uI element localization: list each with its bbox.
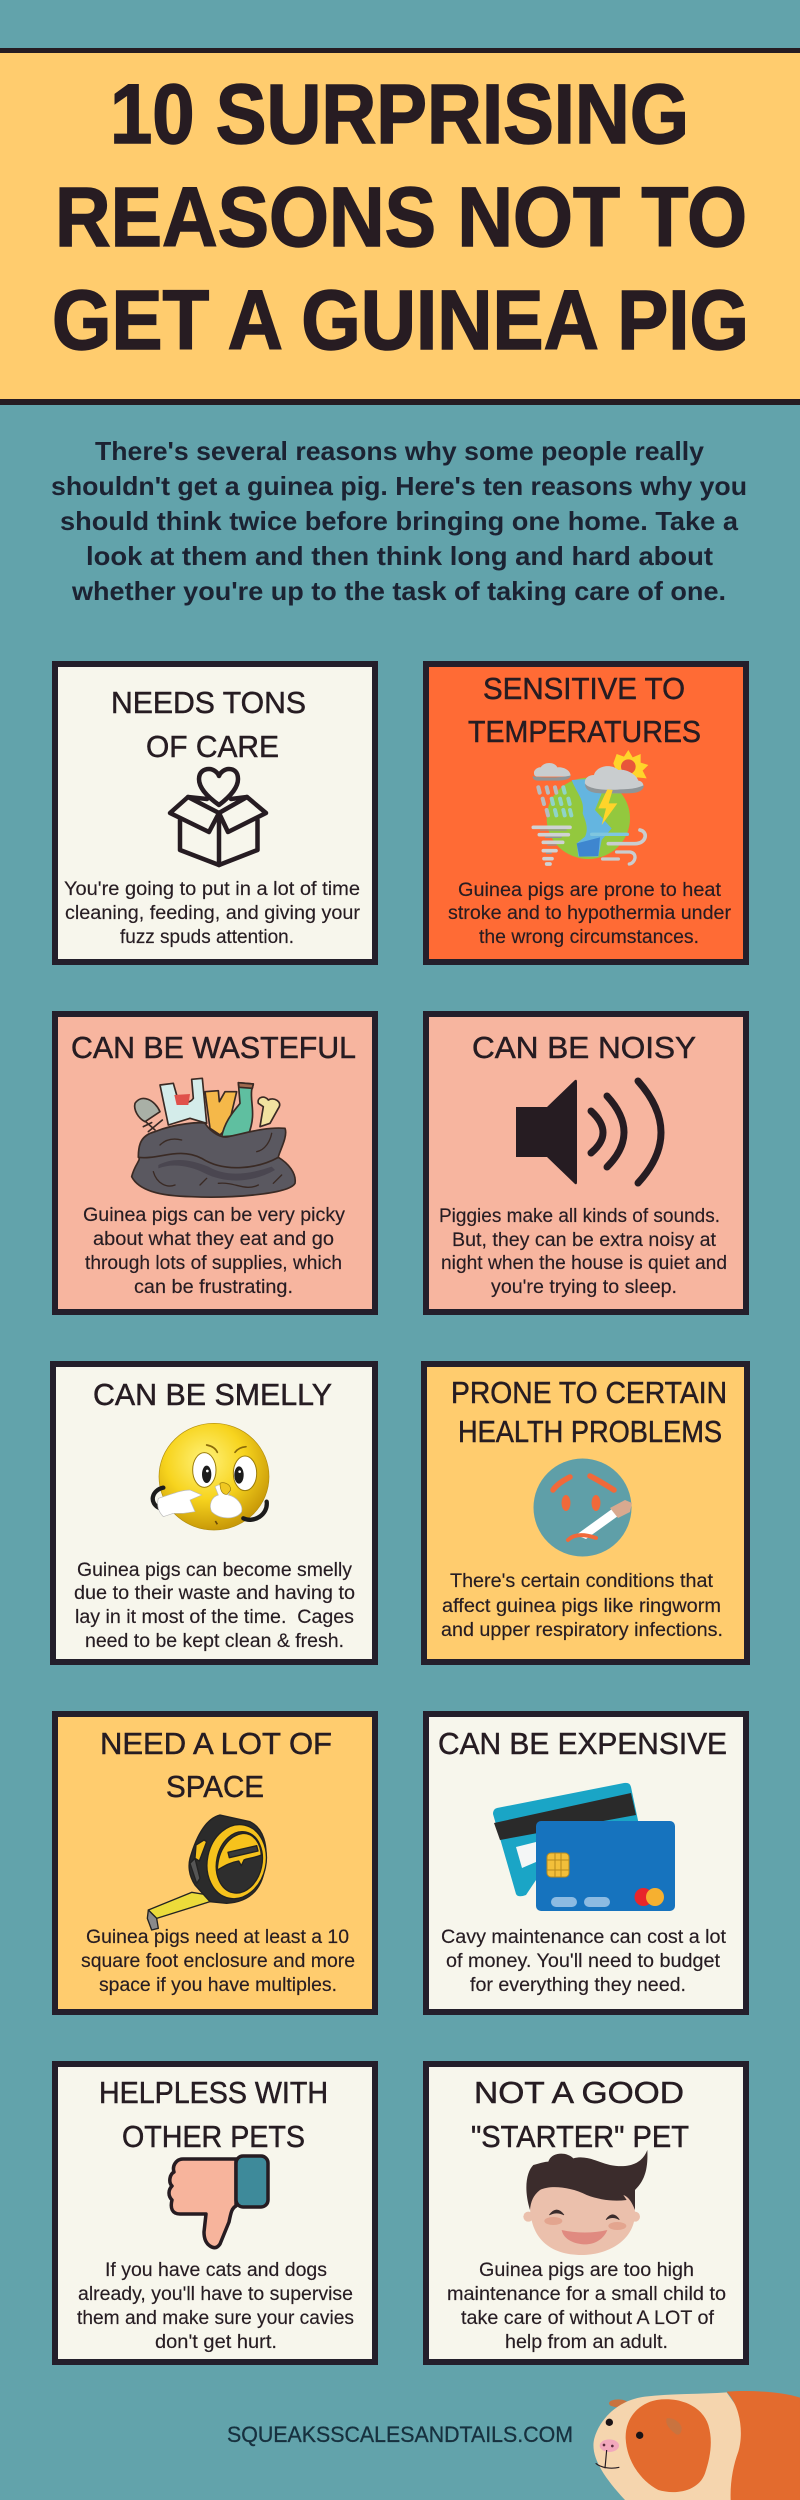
heading: OTHER PETS bbox=[122, 2119, 305, 2154]
panel: prone to certain health problems bbox=[421, 1361, 750, 1665]
body text: night when the house is quiet and bbox=[441, 1253, 727, 1274]
body text: help from an adult. bbox=[505, 2332, 668, 2353]
body text: fuzz spuds attention. bbox=[120, 927, 294, 948]
panel: sensitive to temperatures bbox=[423, 661, 749, 965]
body text bbox=[448, 880, 732, 948]
title: GET A GUINEA PIG bbox=[52, 273, 749, 367]
panel: not a good starter pet bbox=[423, 2061, 749, 2365]
intro paragraph bbox=[51, 436, 747, 606]
intro paragraph: whether you're up to the task of taking care of one. bbox=[71, 576, 726, 606]
icon: thumbs down bbox=[169, 2156, 268, 2248]
icon: speaker bbox=[516, 1080, 661, 1184]
intro paragraph: look at them and then think long and hard about bbox=[86, 541, 713, 571]
heading bbox=[100, 1726, 332, 1804]
body text: about what they eat and go bbox=[93, 1229, 334, 1250]
title: 10 SURPRISING bbox=[110, 67, 689, 161]
body text bbox=[74, 1560, 355, 1652]
heading: OF CARE bbox=[146, 729, 279, 764]
body text: need to be kept clean & fresh. bbox=[85, 1631, 344, 1652]
heading bbox=[471, 2075, 689, 2154]
panel: need a lot of space bbox=[52, 1711, 378, 2015]
body text: maintenance for a small child to bbox=[447, 2284, 726, 2305]
title: REASONS NOT TO bbox=[55, 170, 747, 264]
body text: Cavy maintenance can cost a lot bbox=[441, 1927, 727, 1948]
icon: heart in box bbox=[170, 769, 266, 865]
body text: You're going to put in a lot of time bbox=[64, 879, 360, 900]
icon: earth and weather bbox=[533, 750, 648, 864]
heading: "STARTER" PET bbox=[471, 2119, 689, 2154]
panel: needs tons of care bbox=[52, 661, 378, 965]
icon: tape measure bbox=[147, 1815, 273, 1930]
icon: guinea pig bbox=[593, 2391, 800, 2500]
body text bbox=[441, 1927, 727, 1996]
heading: SENSITIVE TO bbox=[483, 671, 685, 706]
footer website: SQUEAKSSCALESANDTAILS.COM bbox=[227, 2422, 573, 2447]
body text: the wrong circumstances. bbox=[479, 927, 699, 948]
body text: already, you'll have to supervise bbox=[78, 2284, 353, 2305]
body text: them and make sure your cavies bbox=[77, 2308, 354, 2329]
intro paragraph: should think twice before bringing one home. Take a bbox=[60, 506, 739, 536]
heading: SPACE bbox=[166, 1769, 264, 1804]
heading: TEMPERATURES bbox=[468, 714, 701, 749]
title banner bbox=[0, 48, 800, 405]
body text: If you have cats and dogs bbox=[105, 2260, 327, 2281]
icon: sick face with thermometer bbox=[534, 1458, 632, 1556]
heading: PRONE TO CERTAIN bbox=[451, 1375, 727, 1410]
body text: Guinea pigs are prone to heat bbox=[458, 880, 722, 901]
icon: laughing child bbox=[523, 2150, 647, 2255]
heading: HELPLESS WITH bbox=[99, 2075, 328, 2110]
body text: Piggies make all kinds of sounds. bbox=[439, 1206, 720, 1227]
body text bbox=[77, 2260, 354, 2353]
panel: can be noisy bbox=[423, 1011, 749, 1315]
intro paragraph: shouldn't get a guinea pig. Here's ten reasons why you bbox=[51, 471, 747, 501]
body text: don't get hurt. bbox=[155, 2332, 277, 2353]
body text: stroke and to hypothermia under bbox=[448, 903, 732, 924]
body text: Guinea pigs can be very picky bbox=[83, 1205, 346, 1226]
heading: HEALTH PROBLEMS bbox=[458, 1414, 722, 1449]
body text: Guinea pigs need at least a 10 bbox=[86, 1927, 349, 1948]
body text: Guinea pigs are too high bbox=[479, 2260, 694, 2281]
heading bbox=[111, 685, 306, 764]
heading bbox=[468, 671, 701, 749]
body text: But, they can be extra noisy at bbox=[452, 1230, 717, 1251]
panel: can be wasteful bbox=[52, 1011, 378, 1315]
body text: due to their waste and having to bbox=[74, 1583, 355, 1604]
body text: lay in it most of the time. Cages bbox=[75, 1607, 354, 1628]
body text bbox=[64, 879, 361, 948]
icon: credit cards bbox=[493, 1783, 675, 1911]
body text: space if you have multiples. bbox=[99, 1975, 337, 1996]
panel: can be expensive bbox=[423, 1711, 749, 2015]
heading: CAN BE WASTEFUL bbox=[71, 1030, 356, 1065]
body text: for everything they need. bbox=[470, 1975, 686, 1996]
body text: affect guinea pigs like ringworm bbox=[442, 1596, 721, 1617]
body text bbox=[439, 1206, 727, 1298]
body text bbox=[83, 1205, 346, 1298]
body text: can be frustrating. bbox=[134, 1277, 293, 1298]
body text bbox=[447, 2260, 726, 2353]
heading: CAN BE NOISY bbox=[472, 1030, 696, 1065]
intro paragraph: There's several reasons why some people really bbox=[95, 436, 705, 466]
heading bbox=[99, 2075, 328, 2154]
icon: emoji holding nose bbox=[153, 1423, 269, 1530]
icon: trash bag bbox=[132, 1078, 295, 1197]
body text: take care of without A LOT of bbox=[461, 2308, 715, 2329]
panel: can be smelly bbox=[50, 1361, 378, 1665]
heading bbox=[451, 1375, 727, 1449]
body text bbox=[81, 1927, 355, 1996]
heading: NEED A LOT OF bbox=[100, 1726, 332, 1761]
title bbox=[52, 67, 749, 367]
body text bbox=[441, 1571, 723, 1641]
heading: NEEDS TONS bbox=[111, 685, 306, 720]
heading: CAN BE SMELLY bbox=[93, 1377, 332, 1412]
body text: square foot enclosure and more bbox=[81, 1951, 355, 1972]
panel: helpless with other pets bbox=[52, 2061, 378, 2365]
heading: CAN BE EXPENSIVE bbox=[438, 1726, 727, 1761]
body text: of money. You'll need to budget bbox=[446, 1951, 721, 1972]
body text: cleaning, feeding, and giving your bbox=[65, 903, 361, 924]
body text: through lots of supplies, which bbox=[85, 1253, 342, 1274]
body text: you're trying to sleep. bbox=[491, 1277, 677, 1298]
body text: Guinea pigs can become smelly bbox=[77, 1560, 353, 1581]
heading: NOT A GOOD bbox=[474, 2075, 684, 2110]
body text: There's certain conditions that bbox=[450, 1571, 714, 1592]
body text: and upper respiratory infections. bbox=[441, 1620, 723, 1641]
